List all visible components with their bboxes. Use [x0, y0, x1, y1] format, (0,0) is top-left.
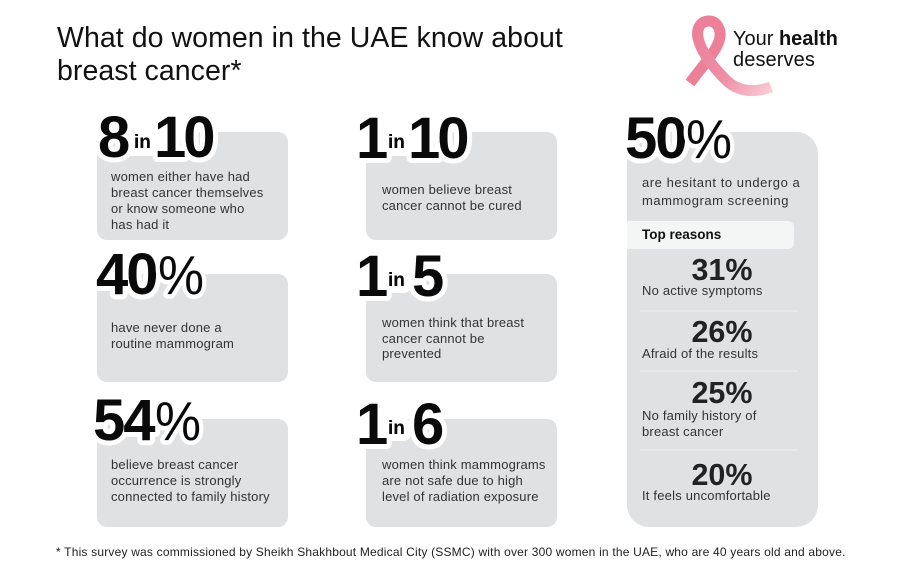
panel: 54% [93, 388, 288, 527]
logo text: Your health [733, 28, 838, 50]
panel: 1 in 5: women think that breast [381, 315, 524, 330]
panel: 1 in 10: 10 [408, 106, 467, 171]
reason: 26% [642, 315, 758, 361]
reason: 25%: 25% [691, 376, 753, 410]
panel: 1 in 5: 5 [412, 244, 444, 309]
panel: 1 in 10: cancer cannot be cured [382, 198, 522, 213]
reason: 31%: 31% [691, 253, 753, 287]
panel: 1 in 5: cancer cannot be [382, 331, 485, 346]
panel: 1 in 6: 6 [412, 392, 444, 457]
reason: 26%: 26% [691, 315, 753, 349]
panel: 8 in 10: or know someone who [111, 201, 244, 216]
panel: 1 in 5: in [388, 270, 405, 291]
reason: 25%: No family history of [642, 408, 757, 423]
logo text [733, 28, 838, 71]
reason: 31%: No active symptoms [642, 283, 763, 298]
panel: 1 in 10: in [388, 132, 405, 153]
panel: 8 in 10: in [134, 132, 151, 153]
panel: 54%: connected to family history [111, 489, 270, 504]
panel: 1 in 10: 1 [356, 106, 388, 171]
panel: 8 in 10 [97, 105, 288, 240]
panel: 8 in 10: in [134, 132, 151, 153]
panel: 40% [96, 242, 288, 382]
panel: 1 in 5: in [388, 270, 405, 291]
panel: 1 in 10: women believe breast [381, 182, 512, 197]
reason: 25%: breast cancer [642, 424, 724, 439]
reason: 25% [642, 376, 757, 439]
panel: 40%: have never done a [111, 320, 222, 335]
panel: 1 in 5: 1 [356, 244, 388, 309]
logo: pink ribbon [690, 21, 771, 91]
panel: 54%: % [155, 390, 201, 452]
panel: 8 in 10: breast cancer themselves [111, 185, 264, 200]
panel: 54%: 54 [93, 388, 155, 453]
panel: 1 in 10 [356, 106, 557, 240]
panel: 40%: % [158, 244, 204, 306]
panel: 50% hesitant: are hesitant to undergo a [642, 175, 801, 190]
panel: 1 in 6 [356, 392, 557, 527]
top reasons label: Top reasons [642, 227, 721, 242]
panel: 1 in 5: prevented [382, 346, 441, 361]
reason: 20% [642, 458, 771, 503]
panel: 8 in 10: has had it [111, 217, 169, 232]
reason: 26%: Afraid of the results [642, 346, 758, 361]
panel: 1 in 6: women think mammograms [381, 457, 546, 472]
panel: 54%: believe breast cancer [111, 457, 239, 472]
panel: 54%: occurrence is strongly [111, 473, 242, 488]
panel: 1 in 6: in [388, 418, 405, 439]
panel: 40%: 40 [96, 242, 157, 307]
panel: 50% hesitant: 50 [625, 106, 686, 171]
panel: 1 in 6: level of radiation exposure [382, 489, 539, 504]
top reasons label [627, 221, 794, 249]
reason: 20%: It feels uncomfortable [642, 488, 771, 503]
logo text: deserves [733, 49, 815, 71]
panel: 40%: routine mammogram [111, 336, 234, 351]
footnote: * This survey was commissioned by Sheikh Shakhbout Medical City (SSMC) with over 300 women in the UAE, who are 40 years old and above. [56, 545, 846, 559]
panel: 50% hesitant: mammogram screening [642, 193, 789, 208]
panel: 50% hesitant [625, 106, 818, 527]
panel: 1 in 6: are not safe due to high [382, 473, 523, 488]
panel: 8 in 10: 10 [154, 105, 213, 170]
panel: 1 in 10: in [388, 132, 405, 153]
panel: 1 in 6: in [388, 418, 405, 439]
panel: 8 in 10: women either have had [110, 169, 250, 184]
panel: 1 in 6: 1 [356, 392, 388, 457]
panel: 1 in 5 [356, 244, 557, 382]
title: breast cancer* [57, 55, 242, 87]
panel: 50% hesitant: % [686, 108, 732, 170]
panel: 8 in 10: 8 [98, 105, 130, 170]
reason: 20%: 20% [691, 458, 753, 492]
title [57, 22, 563, 87]
title: What do women in the UAE know about [57, 22, 563, 54]
reason: 31% [642, 253, 763, 298]
